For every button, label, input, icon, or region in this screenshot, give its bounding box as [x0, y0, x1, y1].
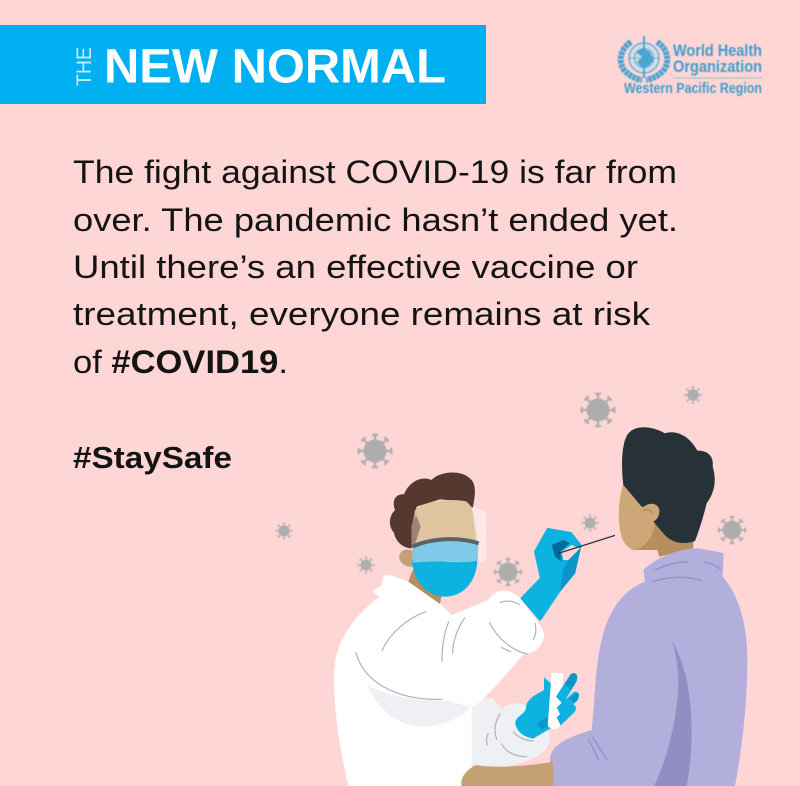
logo text — [624, 41, 762, 97]
logo text: Organization — [673, 57, 762, 76]
face shield — [472, 507, 487, 562]
worker bottom hand and arm — [461, 762, 553, 786]
worker lower glove and swab pack — [515, 673, 579, 739]
sweater shadow fold — [654, 641, 692, 786]
title banner — [0, 25, 486, 104]
worker ear — [399, 550, 413, 567]
main message text: Until there’s an effective vaccine or — [73, 249, 638, 285]
suit wrinkle lines — [356, 601, 536, 699]
illustration: patient — [549, 427, 747, 786]
main message text: The fight against COVID-19 is far from — [73, 154, 677, 190]
suit shadow — [367, 684, 470, 727]
worker white suit — [334, 575, 544, 786]
title main words: NEW NORMAL: NEW NORMAL — [104, 40, 446, 94]
main message text: over. The pandemic hasn’t ended yet. — [73, 202, 678, 238]
main message text — [73, 154, 678, 380]
virus particles — [276, 387, 745, 585]
patient sweater — [549, 548, 747, 786]
worker neck — [408, 570, 442, 604]
title small word: THE: THE — [73, 47, 96, 86]
worker back sleeve — [467, 697, 550, 767]
logo text: World Health — [673, 41, 762, 60]
main message text: treatment, everyone remains at risk — [73, 296, 651, 332]
worker hair — [390, 472, 475, 548]
worker raised glove with swab — [522, 529, 615, 619]
patient ear — [643, 504, 659, 522]
face shadow — [411, 515, 421, 544]
WHO logo — [621, 36, 762, 97]
logo text: Western Pacific Region — [624, 81, 762, 97]
icon: WHO emblem — [621, 36, 667, 80]
surgical mask — [412, 539, 479, 597]
main message text: of #COVID19 . — [73, 344, 288, 380]
illustration: health worker — [334, 472, 615, 786]
patient hair — [622, 427, 715, 543]
sleeve lines — [486, 714, 533, 757]
sweater wrinkle lines — [589, 562, 720, 759]
patient neck and face — [619, 483, 693, 557]
hashtag: StaySafe: #StaySafe — [73, 440, 232, 475]
worker face — [412, 500, 478, 543]
